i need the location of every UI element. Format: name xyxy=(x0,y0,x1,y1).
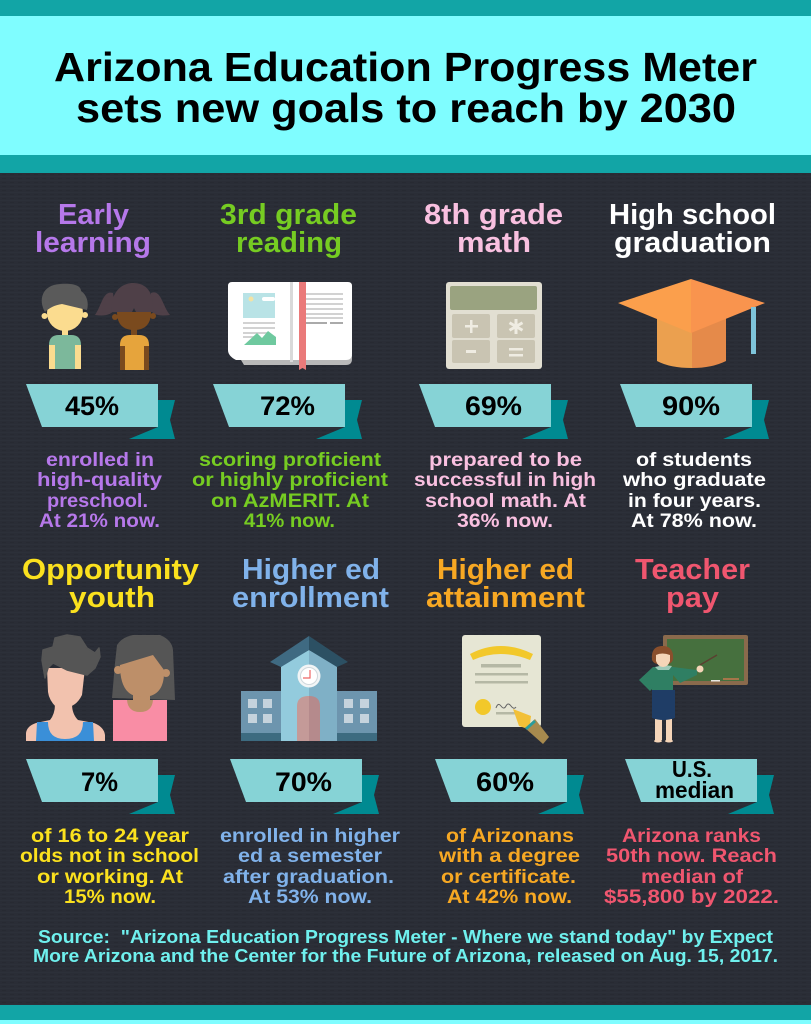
bottom light strip xyxy=(0,1020,811,1024)
heading: higher ed attainment: Higher ed xyxy=(437,554,574,586)
description: opportunity youth xyxy=(20,825,199,908)
panel: 3rd grade reading xyxy=(192,199,389,532)
heading: 3rd grade reading xyxy=(220,199,357,259)
description: higher ed enrollment: ed a semester xyxy=(238,845,382,867)
heading: 3rd grade reading: 3rd grade xyxy=(220,199,357,231)
source note: Source: "Arizona Education Progress Meter - Where we stand today" by Expect xyxy=(38,926,773,947)
heading: higher ed attainment xyxy=(426,554,585,614)
heading: 8th grade math xyxy=(424,199,563,259)
description: higher ed attainment: or certificate. xyxy=(441,866,576,888)
description: opportunity youth: of 16 to 24 year xyxy=(31,825,189,847)
ribbon: 45% xyxy=(26,384,175,439)
icon: certificate and pen xyxy=(462,635,549,744)
ribbon: 7%: 7% xyxy=(81,767,118,797)
description: teacher pay: $55,800 by 2022. xyxy=(604,886,779,908)
description: early learning: preschool. xyxy=(47,490,148,512)
description: higher ed enrollment: enrolled in higher xyxy=(220,825,400,847)
title banner xyxy=(0,16,811,155)
description: 3rd grade reading: 41% now. xyxy=(244,510,335,532)
description: teacher pay xyxy=(604,825,779,908)
heading: higher ed enrollment xyxy=(232,554,389,614)
source note: More Arizona and the Center for the Future of Arizona, released on Aug. 15, 2017. xyxy=(33,945,778,966)
ribbon: 69% xyxy=(419,384,568,439)
panel: higher ed attainment xyxy=(426,554,585,908)
description: 8th grade math xyxy=(414,449,596,532)
top teal band xyxy=(0,0,811,16)
heading: early learning: Early xyxy=(58,199,129,231)
description: higher ed enrollment: At 53% now. xyxy=(248,886,372,908)
description: higher ed attainment: of Arizonans xyxy=(446,825,574,847)
ribbon: 72%: 72% xyxy=(260,391,315,421)
ribbon: 70% xyxy=(230,759,379,814)
ribbon: 60%: 60% xyxy=(476,767,534,797)
icon: graduation cap xyxy=(618,279,765,368)
description: 3rd grade reading: on AzMERIT. At xyxy=(211,490,370,512)
panel: teacher pay xyxy=(604,554,779,908)
description: higher ed attainment xyxy=(438,825,580,908)
icon: open book xyxy=(228,282,352,370)
description: early learning: At 21% now. xyxy=(39,510,160,532)
heading: higher ed enrollment: enrollment xyxy=(232,582,389,614)
bottom teal band xyxy=(0,1005,811,1020)
description: high school graduation: in four years. xyxy=(628,490,761,512)
heading: teacher pay: Teacher xyxy=(635,554,750,586)
description: early learning xyxy=(37,449,162,532)
panel: 8th grade math xyxy=(414,199,596,532)
ribbon: 72% xyxy=(213,384,362,439)
heading: early learning xyxy=(35,199,151,259)
description: high school graduation xyxy=(622,449,766,532)
ribbon: 69%: 69% xyxy=(465,391,522,421)
ribbon: 90%: 90% xyxy=(662,391,720,421)
title: Arizona Education Progress Meter xyxy=(54,44,757,90)
icon: two children xyxy=(42,283,170,370)
heading: teacher pay: pay xyxy=(666,582,719,614)
heading: opportunity youth: youth xyxy=(69,582,155,614)
panel: high school graduation xyxy=(609,199,776,532)
ribbon: U.S. median xyxy=(625,756,774,814)
ribbon: U.S. median: median xyxy=(655,777,734,803)
description: opportunity youth: 15% now. xyxy=(64,886,156,908)
ribbon: 7% xyxy=(26,759,175,814)
ribbon: 45%: 45% xyxy=(65,391,119,421)
description: higher ed enrollment: after graduation. xyxy=(223,866,394,888)
icon: calculator xyxy=(446,282,542,369)
icon: two young adults xyxy=(26,635,175,741)
heading: 3rd grade reading: reading xyxy=(236,227,342,259)
ribbon: 60% xyxy=(435,759,584,814)
description: opportunity youth: olds not in school xyxy=(20,845,199,867)
description: 8th grade math: prepared to be xyxy=(429,449,582,471)
heading: teacher pay xyxy=(635,554,750,614)
panel: early learning xyxy=(26,199,175,532)
panel: opportunity youth xyxy=(20,554,199,908)
icon: school building xyxy=(241,636,377,741)
heading: early learning: learning xyxy=(35,227,151,259)
ribbon: 90% xyxy=(620,384,769,439)
description: higher ed attainment: with a degree xyxy=(438,845,580,867)
heading: 8th grade math: math xyxy=(457,227,531,259)
description: high school graduation: who graduate xyxy=(622,469,766,491)
description: high school graduation: At 78% now. xyxy=(631,510,757,532)
description: high school graduation: of students xyxy=(636,449,752,471)
heading: 8th grade math: 8th grade xyxy=(424,199,563,231)
description: teacher pay: median of xyxy=(641,866,744,888)
heading: higher ed attainment: attainment xyxy=(426,582,585,614)
heading: high school graduation: graduation xyxy=(614,227,771,259)
description: 3rd grade reading xyxy=(192,449,389,532)
icon: teacher at chalkboard xyxy=(639,635,748,742)
description: higher ed enrollment xyxy=(220,825,400,908)
description: early learning: high-quality xyxy=(37,469,162,491)
lower teal band xyxy=(0,155,811,173)
description: higher ed attainment: At 42% now. xyxy=(447,886,572,908)
description: teacher pay: 50th now. Reach xyxy=(606,845,777,867)
source note xyxy=(33,926,778,966)
title xyxy=(54,44,757,131)
panel: higher ed enrollment xyxy=(220,554,400,908)
heading: high school graduation xyxy=(609,199,776,259)
title: sets new goals to reach by 2030 xyxy=(76,85,736,131)
description: early learning: enrolled in xyxy=(46,449,154,471)
heading: opportunity youth: Opportunity xyxy=(22,554,199,586)
description: teacher pay: Arizona ranks xyxy=(622,825,761,847)
description: 3rd grade reading: or highly proficient xyxy=(192,469,389,491)
heading: high school graduation: High school xyxy=(609,199,776,231)
heading: higher ed enrollment: Higher ed xyxy=(242,554,380,586)
heading: opportunity youth xyxy=(22,554,199,614)
description: opportunity youth: or working. At xyxy=(37,866,184,888)
description: 3rd grade reading: scoring proficient xyxy=(199,449,382,471)
description: 8th grade math: school math. At xyxy=(425,490,587,512)
ribbon: U.S. median: U.S. xyxy=(672,756,712,782)
ribbon: 70%: 70% xyxy=(275,767,332,797)
description: 8th grade math: successful in high xyxy=(414,469,596,491)
description: 8th grade math: 36% now. xyxy=(457,510,553,532)
